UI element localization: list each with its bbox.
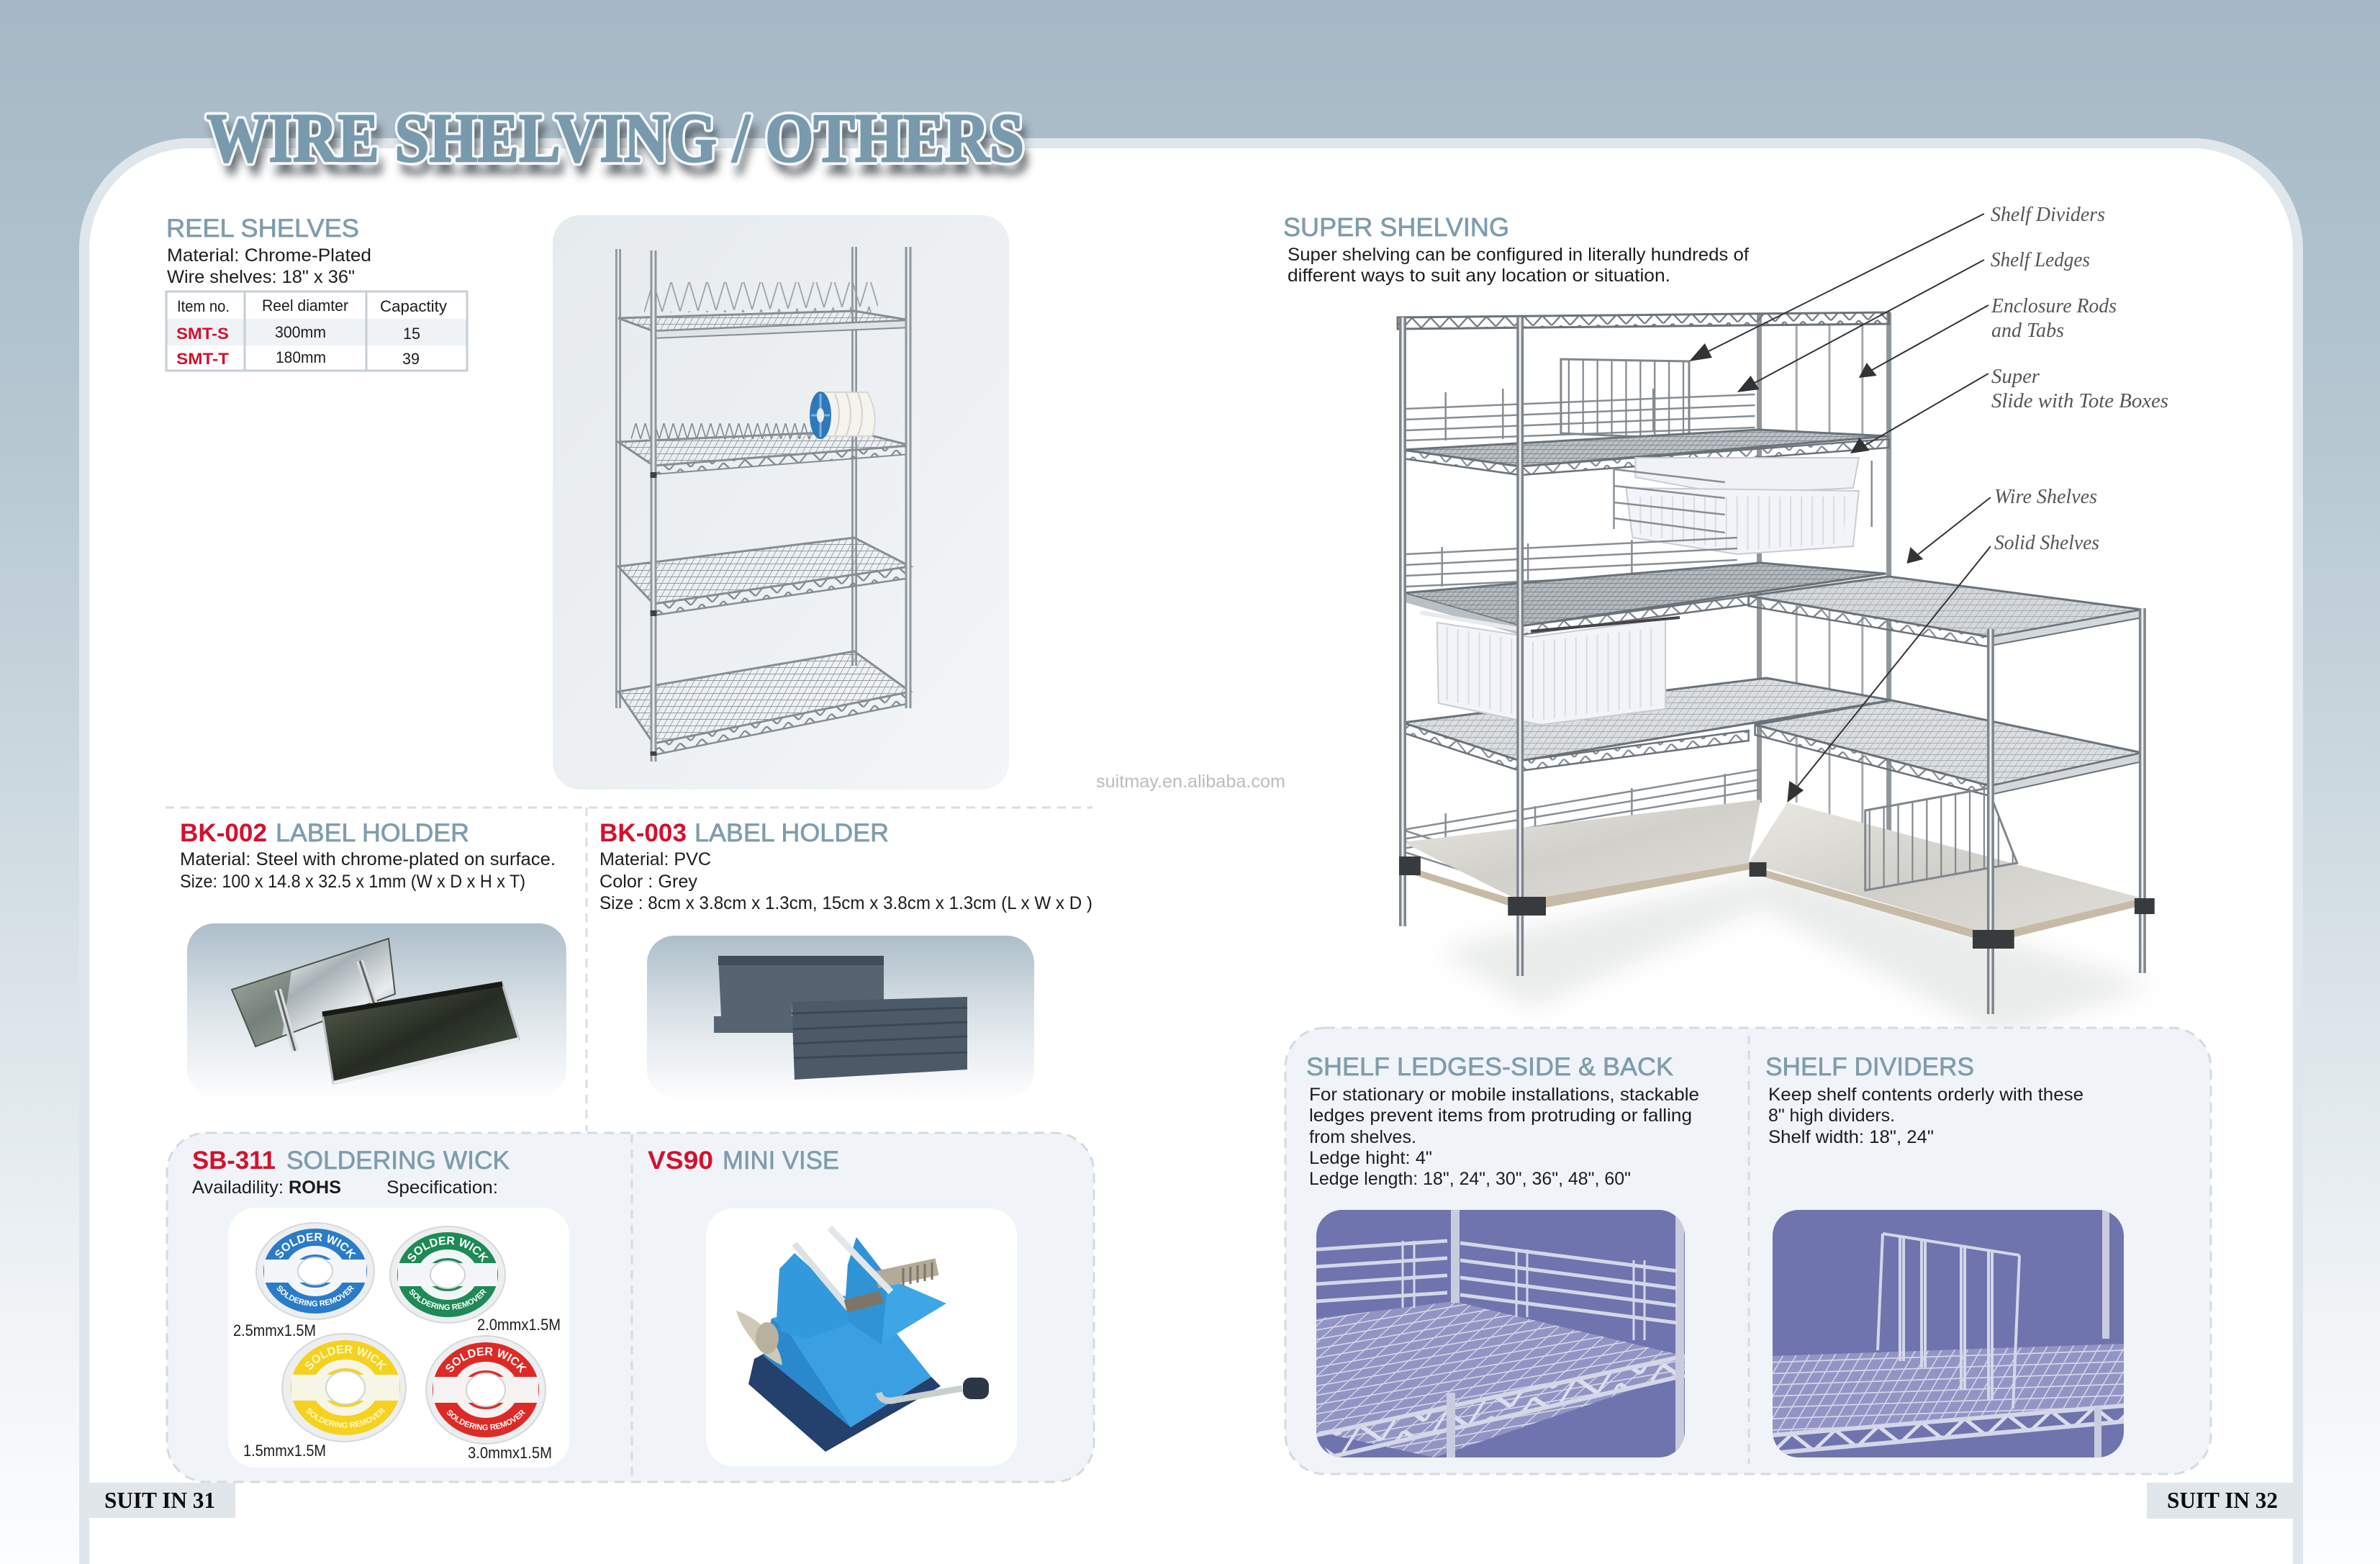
- spool size labels: [233, 1316, 561, 1462]
- tote boxes upper: [1614, 458, 1872, 554]
- shelf ledges description: For stationary or mobile installations, stackable: [1309, 1085, 1699, 1105]
- enclosure rods: [1796, 322, 1863, 842]
- shelf ledges description: from shelves.: [1309, 1127, 1416, 1147]
- shelf lower: [1403, 678, 1892, 761]
- callouts: part labels: Wire Shelves: [1994, 485, 2097, 508]
- divider upper: [1561, 359, 1689, 439]
- shelf ledges description: [1309, 1085, 1699, 1189]
- icon: yellow solder wick spool: SOLDERING REMOVER: [307, 1408, 386, 1428]
- icon: red solder wick spool: SOLDER WICK: [445, 1347, 527, 1373]
- heading: BK-003: LABEL HOLDER: [694, 819, 889, 847]
- back ledge upper: [1406, 389, 1755, 440]
- reel shelves wire size text: Wire shelves: 18" x 36": [167, 267, 355, 287]
- heading: BK-002: LABEL HOLDER: [276, 819, 469, 847]
- tote box lower: [1421, 613, 1680, 725]
- table: reel shelf items: SMT-T: [176, 350, 230, 368]
- callouts: part labels: [1991, 203, 2168, 554]
- BK-002 description: [180, 849, 556, 892]
- title: WIRE SHELVING / OTHERS: [207, 99, 1024, 176]
- heading: BK-003: BK-003: [599, 819, 687, 847]
- BK-002 description: Material: Steel with chrome-plated on surface.: [180, 849, 556, 869]
- table: reel shelf items: Capactity: [380, 297, 447, 315]
- spool size labels: 2.5mmx1.5M: [233, 1321, 316, 1339]
- heading: reel shelves: REEL SHELVES: [166, 214, 359, 243]
- icon: green solder wick spool: SOLDER WICK: [407, 1237, 489, 1262]
- icon: yellow solder wick spool: [281, 1333, 407, 1442]
- back posts: [1760, 312, 1889, 835]
- photo: chrome label holders: [187, 923, 566, 1096]
- shelf dividers description: Shelf width: 18", 24": [1768, 1127, 1934, 1147]
- heading: BK-002: [180, 819, 469, 847]
- heading: VS90: MINI VISE: [723, 1147, 839, 1175]
- panel background: [167, 1133, 1094, 1482]
- photo: shelf divider: [1773, 1210, 2124, 1457]
- heading: SB-311: [192, 1147, 510, 1175]
- watermark: suitmay.en.alibaba.com: [1096, 772, 1285, 792]
- callouts: part labels: Super: [1991, 365, 2040, 388]
- photo: reel shelf rack: [553, 215, 1009, 790]
- reel shelves material text: Material: Chrome-Plated: [167, 245, 371, 266]
- top frame: [1398, 312, 1889, 329]
- heading: BK-003: [599, 819, 889, 847]
- panel: super shelving: [1283, 203, 2168, 1036]
- back ledge middle: [1406, 538, 1737, 587]
- panel: shelf ledges and dividers: [1285, 1028, 2211, 1474]
- panel divider: [1747, 1036, 1750, 1464]
- panel divider: [630, 1134, 633, 1481]
- front posts: [1403, 317, 2143, 1014]
- table: reel shelf items: SMT-S: [176, 325, 229, 343]
- icon: red solder wick spool: SOLDERING REMOVER: [447, 1409, 525, 1430]
- page number right: [2147, 1483, 2293, 1519]
- shelf middle: [1403, 563, 1886, 626]
- table: reel shelf items: 39: [402, 350, 420, 368]
- SB-311 description: ROHS: [289, 1177, 341, 1198]
- icon: yellow solder wick spool: SOLDER WICK: [305, 1344, 387, 1370]
- callouts: part labels: Solid Shelves: [1994, 531, 2099, 554]
- solid shelf: [1403, 800, 1760, 901]
- heading: shelf ledges: SHELF LEDGES-SIDE & BACK: [1306, 1053, 1673, 1081]
- BK-002 description: Size: 100 x 14.8 x 32.5 x 1mm (W x D x H x T): [180, 872, 525, 892]
- SB-311 description: Availadility:: [192, 1177, 284, 1198]
- heading: VS90: VS90: [648, 1147, 713, 1175]
- panel background: [1285, 1028, 2211, 1474]
- spool size labels: 2.0mmx1.5M: [477, 1316, 561, 1334]
- title: WIRE SHELVING / OTHERS: [207, 99, 1024, 176]
- heading: SB-311: SOLDERING WICK: [286, 1147, 510, 1175]
- BK-003 description: Size : 8cm x 3.8cm x 1.3cm, 15cm x 3.8cm x 1.3cm (L x W x D ): [599, 893, 1092, 913]
- callouts: part labels: Slide with Tote Boxes: [1991, 389, 2168, 412]
- table: reel shelf items: Item no.: [177, 297, 230, 315]
- icon: blue solder wick spool: [255, 1222, 375, 1320]
- super shelving description: [1288, 245, 1749, 286]
- callouts: part labels: Shelf Ledges: [1991, 248, 2090, 271]
- shelf ledges description: ledges prevent items from protruding or falling: [1309, 1106, 1692, 1126]
- shelf upper: [1403, 430, 1889, 466]
- photo: super shelving unit: [1398, 312, 2155, 1036]
- page number left: [89, 1483, 235, 1518]
- shelf dividers description: Keep shelf contents orderly with these: [1768, 1085, 2083, 1105]
- SB-311 description: Specification:: [386, 1177, 498, 1198]
- divider lower: [1865, 788, 2017, 890]
- photo: PVC label holders: [647, 936, 1034, 1098]
- photo: solder wick spools: [228, 1208, 569, 1468]
- page number left: SUIT IN 31: [104, 1487, 215, 1513]
- shelf ledges description: Ledge length: 18", 24", 30", 36", 48", 60": [1309, 1169, 1631, 1189]
- page number right: SUIT IN 32: [2167, 1487, 2278, 1513]
- table: reel shelf items: 15: [403, 325, 420, 343]
- super shelving description: different ways to suit any location or situation.: [1288, 266, 1670, 286]
- panel: reel shelves: [166, 214, 1009, 790]
- callouts: part labels: Enclosure Rods: [1991, 294, 2117, 317]
- spool size labels: 3.0mmx1.5M: [468, 1444, 552, 1462]
- icon: blue solder wick spool: SOLDERING REMOVER: [276, 1285, 354, 1306]
- photo: shelf ledge: [1316, 1210, 1685, 1457]
- shelf ledges description: Ledge hight: 4": [1309, 1148, 1432, 1168]
- table: reel shelf items: [166, 291, 467, 371]
- icon: green solder wick spool: SOLDERING REMOVER: [409, 1289, 487, 1310]
- icon: green solder wick spool: [389, 1226, 506, 1324]
- table: reel shelf items: 180mm: [276, 348, 326, 366]
- shelf dividers description: 8" high dividers.: [1768, 1106, 1895, 1126]
- super shelving description: Super shelving can be configured in literally hundreds of: [1288, 245, 1749, 265]
- shelf dividers description: [1768, 1085, 2083, 1147]
- heading: VS90: [648, 1147, 839, 1175]
- BK-003 description: Color : Grey: [599, 872, 697, 892]
- heading: SB-311: SB-311: [192, 1147, 276, 1175]
- heading: BK-002: BK-002: [180, 819, 267, 847]
- photo: mini vise: [706, 1208, 1017, 1466]
- black shelf collars: [1399, 856, 2155, 949]
- SB-311 description: [192, 1177, 498, 1198]
- heading: super shelving: SUPER SHELVING: [1283, 212, 1509, 242]
- panel: BK-002 label holder: [180, 819, 566, 1096]
- title: WIRE SHELVING / OTHERS: [212, 111, 1029, 188]
- table: reel shelf items: Reel diamter: [262, 297, 348, 315]
- panel: soldering wick and mini vise: [166, 1131, 1095, 1483]
- table: reel shelf items: 300mm: [275, 323, 326, 341]
- BK-003 description: Material: PVC: [599, 849, 711, 869]
- icon: tape reel: [810, 392, 875, 439]
- spool size labels: 1.5mmx1.5M: [243, 1442, 326, 1460]
- section dividers: [166, 808, 1092, 1131]
- heading: shelf dividers: SHELF DIVIDERS: [1765, 1053, 1974, 1081]
- panel: BK-003 label holder: [599, 819, 1092, 1098]
- callouts: part labels: Shelf Dividers: [1991, 203, 2105, 226]
- BK-003 description: [599, 849, 1092, 913]
- arrows: [1689, 214, 1991, 803]
- icon: blue solder wick spool: SOLDER WICK: [275, 1232, 356, 1260]
- back ledge bottom: [1403, 769, 1760, 889]
- callouts: part labels: and Tabs: [1991, 319, 2064, 342]
- icon: red solder wick spool: [425, 1335, 546, 1445]
